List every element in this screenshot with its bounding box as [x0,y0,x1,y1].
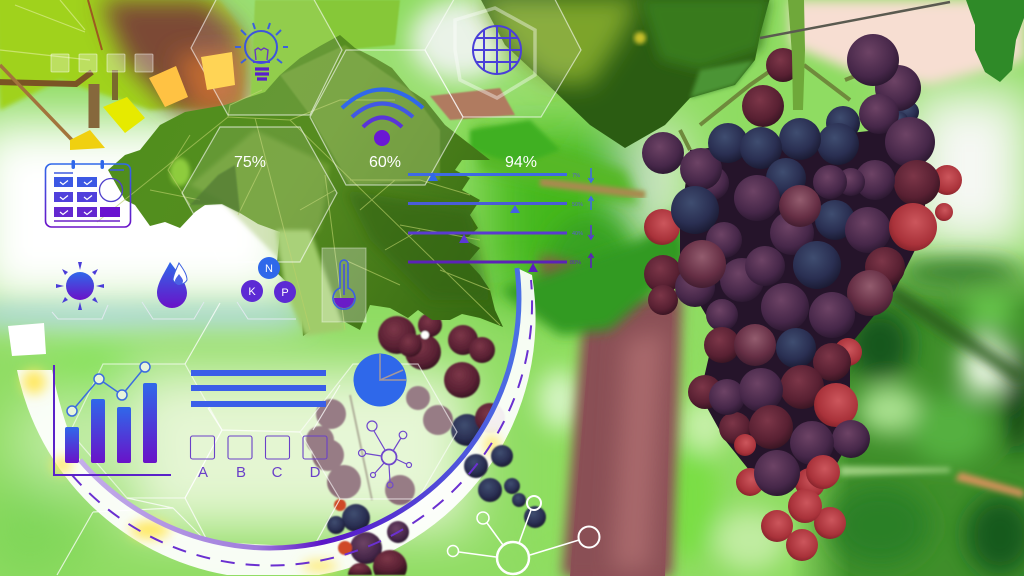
answer boxes A B C D: D [310,464,321,481]
icon: light bulb [235,23,288,79]
photo: shaded underside in leaf area [190,165,240,213]
photo: top right leaf [966,0,1024,82]
photo: leaf veins [97,90,500,330]
percent labels: 75% [234,154,266,171]
decorative coloured tiles [103,52,235,133]
slider controls: 40% [572,231,583,237]
icon: N K P nutrients: N [265,263,273,275]
photo: top-left sunlit leaf and branches [0,0,400,150]
answer boxes A B C D [190,436,327,481]
photo: upper grapes behind the leaf [378,313,505,446]
panel: thermometer [322,248,366,322]
text lines placeholder [191,370,326,407]
photo: lower grapes over the band [327,445,546,575]
progress ring [80,268,519,548]
icon: N K P nutrients: P [281,287,289,299]
photo: large shaded leaf at top centre right [480,0,770,148]
pie chart [354,354,406,406]
icon: water drop [157,262,187,308]
answer boxes A B C D: B [236,464,246,481]
icon: wifi signal [342,90,423,146]
percent labels: 60% [369,154,401,171]
hexagon overlays [52,0,581,575]
icon: calendar [46,160,130,227]
answer boxes A B C D: C [272,464,283,481]
dashed ring [72,280,532,565]
decorative white arc band [17,268,536,575]
photo: grapes faded behind hexagon [306,386,453,505]
tiles row [51,54,153,72]
photo: brown branch behind leaf [430,88,515,120]
photo: large green grape leaf [97,35,503,336]
yellow highlights on arc [22,370,499,571]
answer boxes A B C D: A [198,464,208,481]
photo: main grape cluster [642,0,962,561]
large white network icon [448,496,600,574]
bar chart with line [54,362,171,475]
icon: N K P nutrients: K [248,286,256,298]
icon: sun [56,262,104,310]
icon: globe [473,26,521,74]
white square at arc end [8,323,46,356]
slider controls [408,168,594,272]
slider controls: 7% [572,173,580,179]
slider controls: 50% [572,202,583,208]
percent labels [234,154,537,171]
grape cluster dark core [680,125,925,490]
icon: N K P nutrients [241,257,296,303]
small network icon [358,421,412,488]
percent labels: 94% [505,154,537,171]
slider controls: 80% [570,260,581,266]
